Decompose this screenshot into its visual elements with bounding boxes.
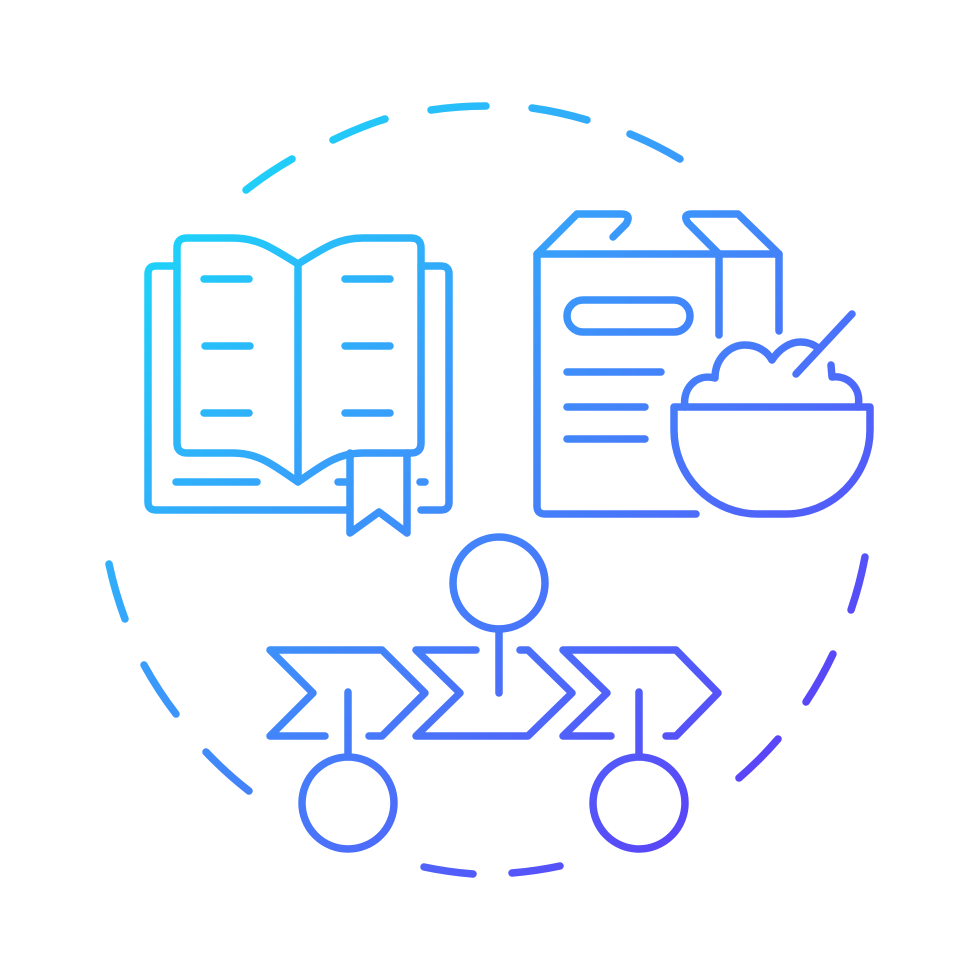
- spoon: [796, 314, 852, 374]
- chevron 1: [270, 650, 425, 736]
- left milestone: [302, 692, 394, 849]
- right milestone: [593, 692, 685, 849]
- bookmark: [350, 453, 407, 533]
- icon: cereal box: [537, 214, 779, 514]
- icon: open book: [148, 238, 449, 533]
- food: [685, 342, 859, 407]
- chevron 2: [416, 650, 572, 736]
- dashed circle ring: [109, 106, 865, 874]
- bowl: [674, 407, 870, 514]
- icon: bowl of food: [674, 314, 870, 514]
- box flaps: [537, 214, 779, 254]
- box label pill: [567, 300, 690, 332]
- top milestone: [453, 537, 545, 693]
- chevron 3: [563, 650, 718, 736]
- box text lines: [567, 372, 661, 439]
- book text lines: [176, 279, 425, 482]
- process flow: chevrons: [270, 650, 718, 736]
- book pages: [177, 238, 421, 482]
- book back cover: [148, 266, 449, 510]
- box outline: [537, 254, 779, 514]
